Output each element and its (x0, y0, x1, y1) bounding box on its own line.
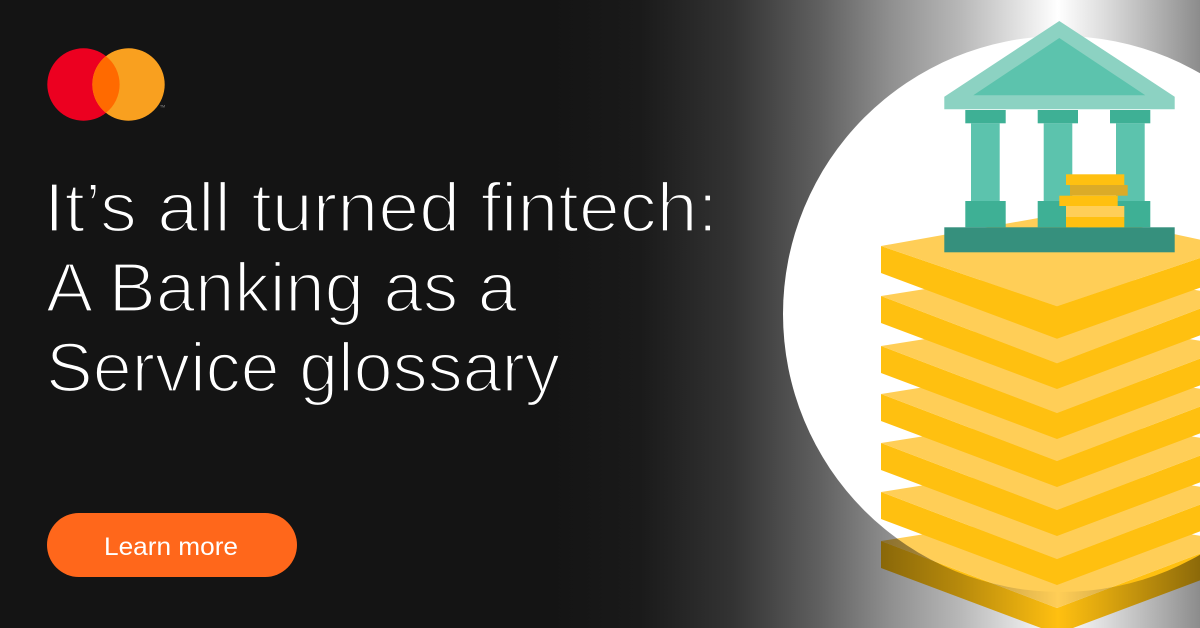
white circle behind illustration (783, 36, 1200, 592)
icon: coin stack (1059, 174, 1128, 227)
icon: bank building (944, 21, 1175, 252)
logo: overlapping circles: TM (160, 104, 165, 108)
bank plinth (944, 227, 1175, 252)
title (44, 168, 718, 406)
bank columns (965, 110, 1150, 227)
button: learn more: Learn more (104, 533, 238, 561)
logo: overlapping circles (47, 48, 165, 121)
title: It’s all turned fintech: (44, 168, 718, 246)
button: learn more (47, 513, 297, 577)
title: Service glossary (46, 328, 560, 406)
title: A Banking as a (46, 248, 517, 326)
bank roof (944, 21, 1175, 109)
icon: stacked gold layers (881, 212, 1200, 628)
